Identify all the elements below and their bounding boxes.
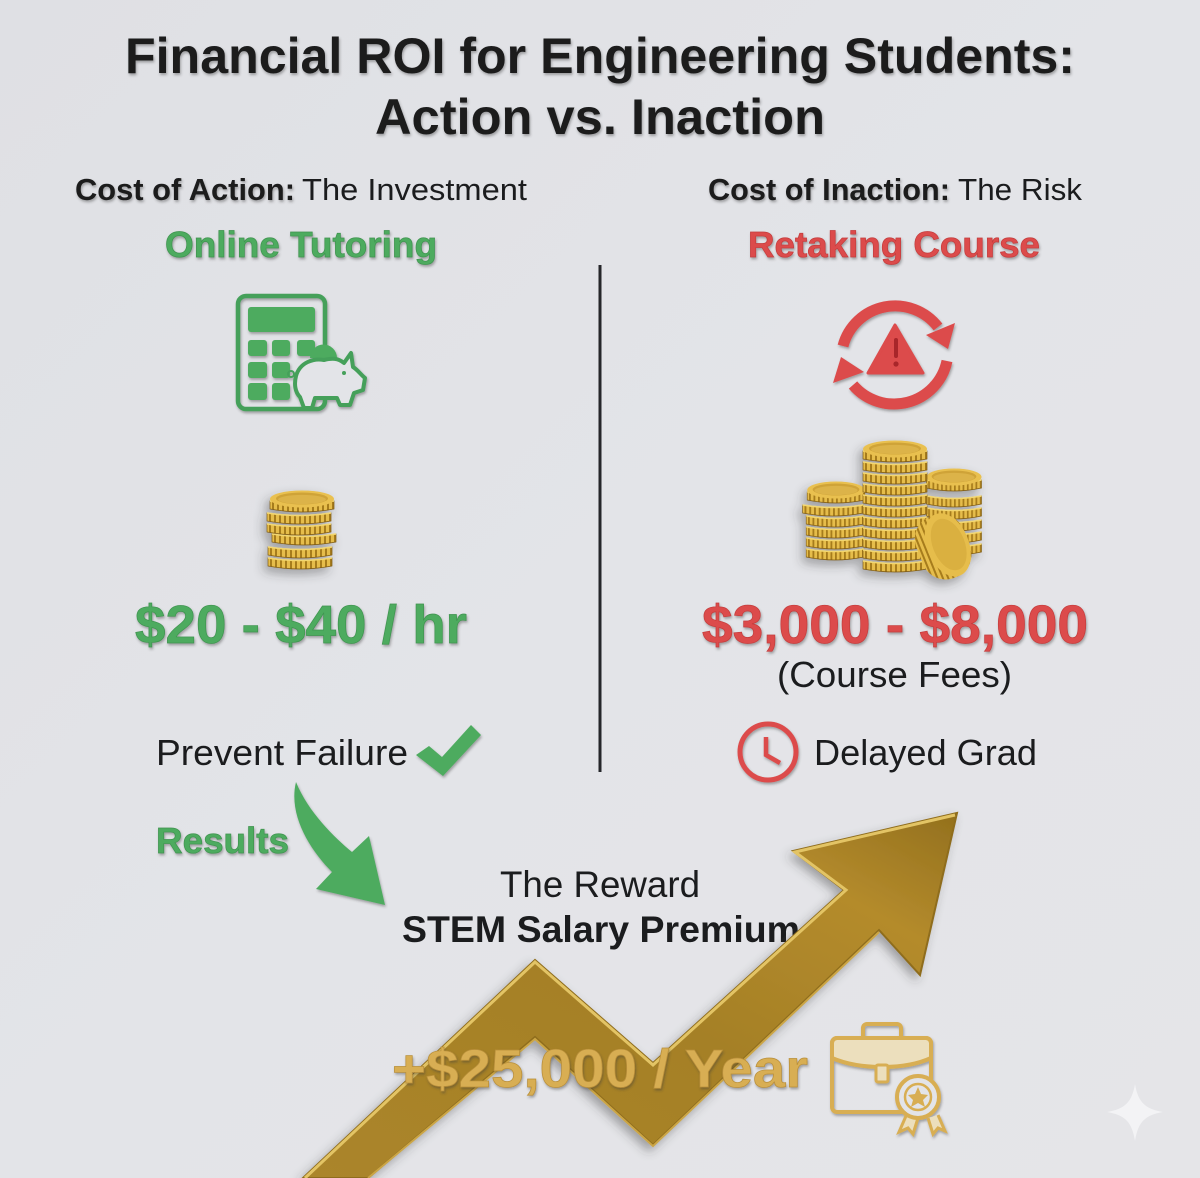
panel: cost of inaction <box>702 172 1088 780</box>
icon: large coin stacks <box>803 440 982 587</box>
text: course fees: (Course Fees) <box>777 654 1012 695</box>
heading: cost of action: Cost of Action: <box>75 172 295 207</box>
title: Financial ROI for Engineering Students: <box>125 28 1075 84</box>
value: retake cost: $3,000 - $8,000 <box>702 595 1088 655</box>
subheading: the risk: The Risk <box>958 172 1082 207</box>
value: salary premium: +$25,000 / Year <box>392 1039 808 1099</box>
label: online tutoring: Online Tutoring <box>165 224 437 265</box>
icon: calculator and piggy bank <box>238 296 365 409</box>
icon: small coin stack <box>267 490 336 569</box>
arrow: green results arrow <box>294 782 385 905</box>
text: delayed grad: Delayed Grad <box>814 732 1037 773</box>
icon: clock <box>740 724 796 780</box>
icon: check mark <box>416 725 481 776</box>
text: stem salary premium: STEM Salary Premium <box>402 909 800 950</box>
label: results: Results <box>156 820 289 861</box>
icon: briefcase with medal <box>832 1024 945 1134</box>
section: the reward <box>402 864 800 950</box>
arrow: gold growth arrow <box>303 813 957 1178</box>
subheading: the investment: The Investment <box>302 172 527 207</box>
label: retaking course: Retaking Course <box>748 224 1040 265</box>
heading: cost of inaction: Cost of Inaction: <box>708 172 950 207</box>
divider <box>598 265 602 772</box>
title <box>125 28 1075 145</box>
icon: sparkle watermark <box>1107 1084 1163 1141</box>
title: Action vs. Inaction <box>375 89 825 145</box>
value: tutoring cost: $20 - $40 / hr <box>135 595 467 655</box>
icon: retake cycle warning <box>833 306 955 404</box>
text: prevent failure: Prevent Failure <box>156 732 408 773</box>
panel: cost of action <box>75 172 527 776</box>
text: the reward: The Reward <box>500 864 700 905</box>
